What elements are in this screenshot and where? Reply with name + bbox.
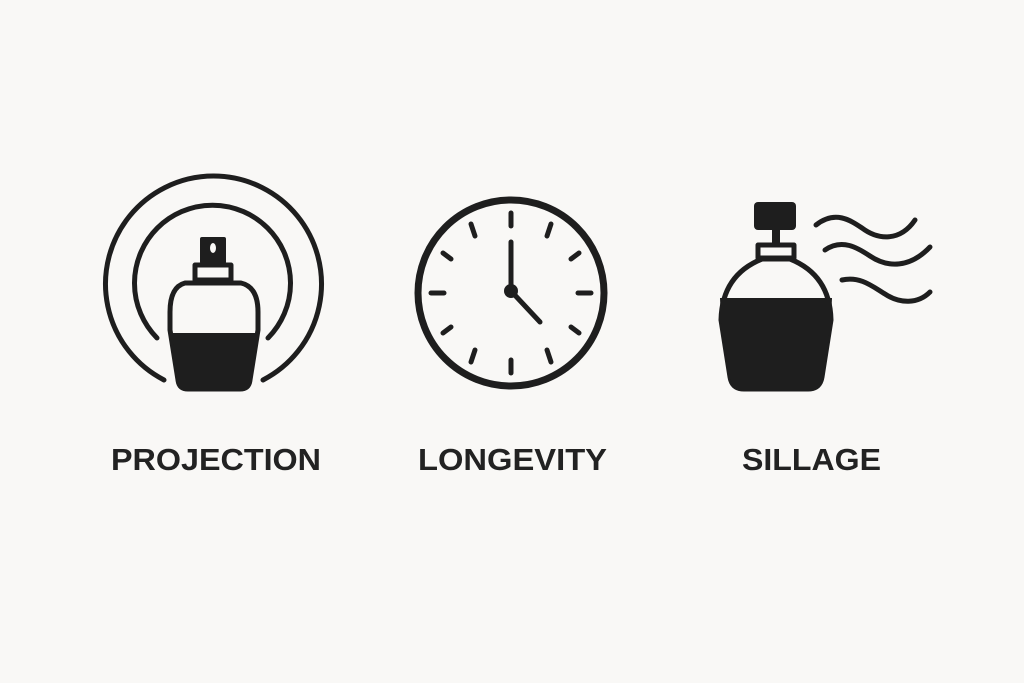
icon: sillage <box>720 202 930 389</box>
outer arc <box>106 176 322 380</box>
label: longevity: LONGEVITY <box>418 442 607 477</box>
icon: projection <box>106 176 322 389</box>
scent waves <box>816 217 930 301</box>
inner arc <box>135 205 290 338</box>
label: projection: PROJECTION <box>111 442 321 477</box>
icon: clock <box>418 200 604 386</box>
bottle <box>170 237 258 389</box>
label: sillage: SILLAGE <box>742 442 881 477</box>
